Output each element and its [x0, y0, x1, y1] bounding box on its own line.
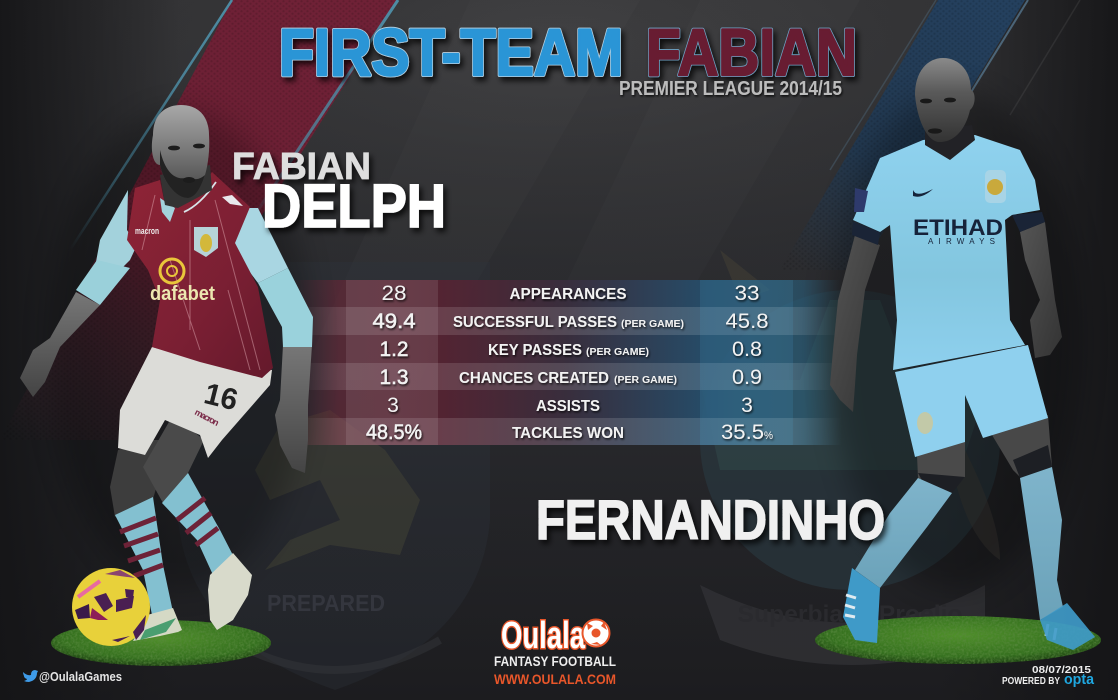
stat row: key passes: (PER GAME): [586, 346, 649, 358]
stat row: tackles won: 35.5: [721, 421, 764, 444]
stat row: assists: ASSISTS: [536, 398, 600, 415]
stat row: chances created: 1.3: [380, 366, 408, 389]
arms: [20, 292, 312, 473]
sponsor: etihad: ETIHAD: [913, 215, 1003, 240]
aston villa crest watermark: PREPARED: [267, 590, 385, 616]
title: [279, 15, 857, 100]
shorts: macron: [193, 407, 221, 428]
name: fabian delph: [232, 146, 446, 240]
title: first-team fabian: FIRST-TEAM: [279, 15, 623, 89]
stat row: tackles won: 48.5%: [366, 421, 422, 444]
title: first-team fabian: [279, 15, 857, 89]
grass base right: [815, 616, 1101, 664]
boots: [843, 568, 1095, 650]
shorts: [118, 347, 272, 458]
sponsor: dafabet: [150, 259, 215, 305]
sponsor: dafabet: dafabet: [150, 283, 215, 305]
stat row: chances created: CHANCES CREATED: [459, 370, 609, 387]
opta logo: opta: [1064, 671, 1095, 688]
oulala logo: [494, 615, 616, 687]
brand: macron: macron: [135, 226, 159, 236]
stat row: tackles won: TACKLES WON: [512, 425, 624, 442]
stat row: successful passes: 45.8: [726, 310, 768, 333]
twitter handle: @OulalaGames: [39, 670, 122, 684]
manchester city crest watermark: Superbia in Proelio: [738, 601, 962, 628]
arms: [830, 222, 1062, 412]
stats table: [290, 280, 842, 445]
title: first-team fabian: FIRST-TEAM: [279, 15, 623, 89]
player: fernandinho: [815, 58, 1101, 664]
stat row: successful passes: SUCCESSFUL PASSES: [453, 314, 617, 331]
shorts: [895, 345, 1048, 457]
stat row: appearances: 33: [734, 282, 760, 305]
icon: twitter bird: [23, 670, 38, 682]
stat row: successful passes: (PER GAME): [621, 318, 684, 330]
blue diagonal stripe: [780, 0, 1080, 270]
head: [152, 105, 212, 208]
sleeves: [76, 190, 313, 347]
badge: city crest: [985, 170, 1006, 203]
jersey: [852, 135, 1045, 370]
name: fabian delph: DELPH: [262, 172, 446, 240]
website: WWW.OULALA.COM: [494, 671, 616, 687]
stat row: tackles won: %: [764, 430, 773, 442]
oulala wordmark: Oulala: [501, 615, 586, 657]
stat row: appearances: APPEARANCES: [510, 286, 627, 303]
shirt number 16: 16: [201, 377, 241, 417]
fantasy football: FANTASY FOOTBALL: [494, 653, 616, 669]
name: fernandinho: FERNANDINHO: [536, 488, 885, 551]
legs: [917, 415, 1052, 492]
knee supports: [918, 445, 1052, 493]
date: 08/07/2015: [1032, 665, 1092, 676]
stat row: tackles won: [366, 421, 773, 444]
stat row: chances created: (PER GAME): [614, 374, 677, 386]
manchester city crest watermark: [700, 250, 1000, 665]
stat row: appearances: [382, 282, 760, 305]
name: fabian delph: FABIAN: [232, 146, 371, 188]
sponsor: etihad: AIRWAYS: [928, 237, 995, 246]
stat row: assists: [387, 394, 753, 417]
socks: [115, 473, 238, 615]
football: [72, 568, 150, 646]
boots: [133, 553, 252, 641]
stat row: key passes: KEY PASSES: [488, 342, 582, 359]
stat row: chances created: [380, 366, 762, 389]
date and credit: [1002, 665, 1095, 688]
powered by: POWERED BY: [1002, 676, 1060, 687]
sleeve badge: [854, 188, 868, 212]
stat row: successful passes: [372, 310, 768, 333]
stat row: key passes: 0.8: [732, 338, 762, 361]
stat row: chances created: 0.9: [732, 366, 762, 389]
stat row: successful passes: 49.4: [372, 310, 416, 333]
player: fabian delph: [20, 105, 313, 666]
stat row: key passes: 1.2: [380, 338, 408, 361]
grass base left: [51, 620, 271, 666]
badge: villa crest: [194, 227, 218, 257]
jersey: [127, 172, 273, 378]
red diagonal stripe: [0, 0, 398, 440]
nike swoosh: [913, 189, 933, 197]
socks: [855, 467, 1063, 620]
stat row: assists: 3: [387, 394, 399, 417]
head: [915, 58, 975, 160]
title: first-team fabian: FABIAN: [646, 15, 857, 89]
title: first-team fabian: FABIAN: [646, 15, 857, 89]
subtitle: PREMIER LEAGUE 2014/15: [619, 78, 842, 100]
aston villa crest watermark: [178, 262, 490, 690]
stat row: appearances: 28: [382, 282, 406, 305]
legs: [110, 415, 204, 517]
stat row: assists: 3: [741, 394, 753, 417]
icon: football: [582, 620, 610, 646]
stat row: key passes: [380, 338, 762, 361]
